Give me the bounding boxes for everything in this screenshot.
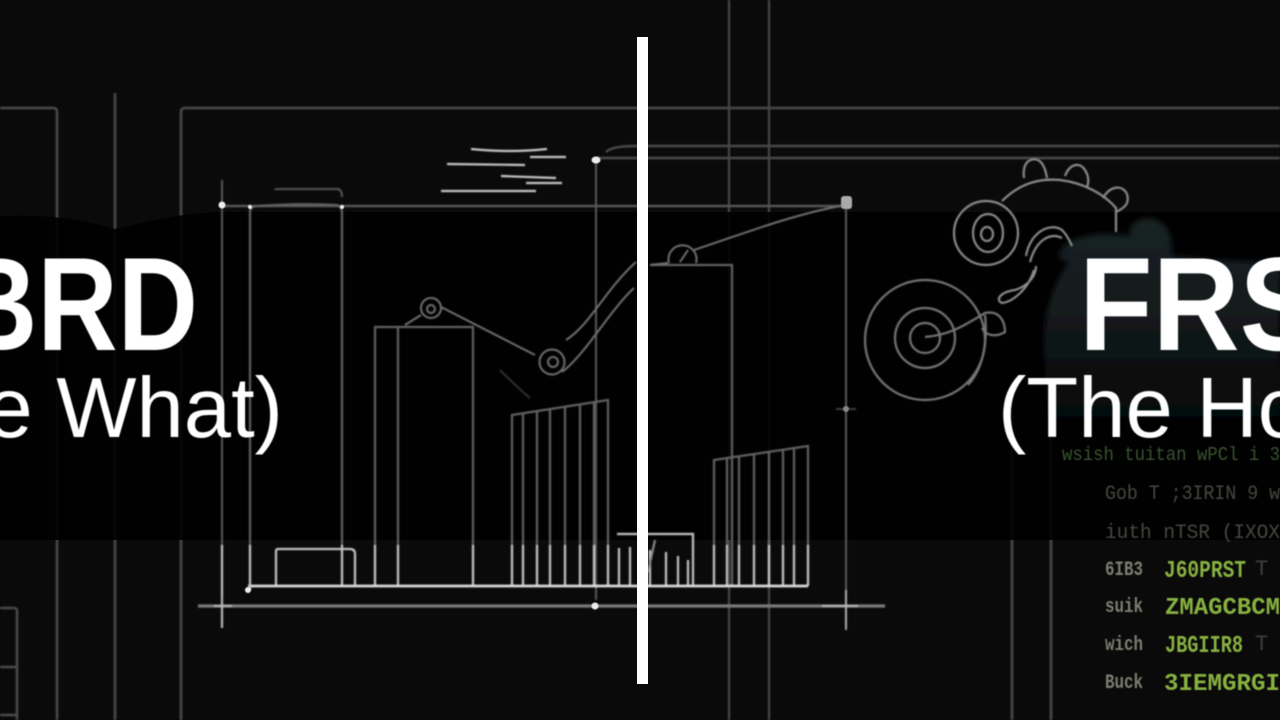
bright bar bottoms — [222, 534, 808, 628]
code trailing glyphs: T — [1255, 632, 1268, 657]
dark title band — [0, 212, 1280, 540]
bars upper outlines — [250, 189, 808, 586]
code green value column — [1164, 558, 1280, 698]
code label column: 6IB3 — [1105, 559, 1143, 582]
code label column: Buck — [1105, 672, 1143, 695]
center divider — [637, 37, 648, 684]
trend curves with nodes — [405, 205, 845, 398]
code label column: suik — [1105, 596, 1143, 619]
large gear — [865, 280, 1005, 400]
code green value column: 3IEMGRGI — [1164, 671, 1280, 698]
small gear — [954, 201, 1018, 265]
gears sketch — [865, 159, 1128, 400]
code green value column: ZMAGCBCM — [1165, 595, 1280, 622]
axes — [198, 159, 885, 628]
code dim rows — [1105, 483, 1280, 545]
gear arm and teeth — [999, 159, 1128, 303]
code label column — [1105, 559, 1143, 695]
code trailing glyphs: T — [1255, 557, 1268, 582]
chart sketch — [198, 159, 885, 630]
left heading: BRD — [0, 231, 283, 456]
chart node dots — [218, 156, 852, 610]
cross markers — [214, 409, 858, 630]
dark shape behind FRS — [1044, 219, 1280, 430]
code dim rows: iuth nTSR (IXOX — [1105, 522, 1280, 545]
code green value column: JBGIIR8 — [1165, 633, 1243, 660]
code green value column: J60PRST — [1164, 558, 1246, 585]
code label column: wich — [1105, 634, 1143, 657]
right heading: FRS — [998, 231, 1280, 456]
sketch note strokes — [441, 149, 566, 191]
code trailing glyphs — [1255, 557, 1268, 657]
code listing — [1062, 444, 1280, 698]
